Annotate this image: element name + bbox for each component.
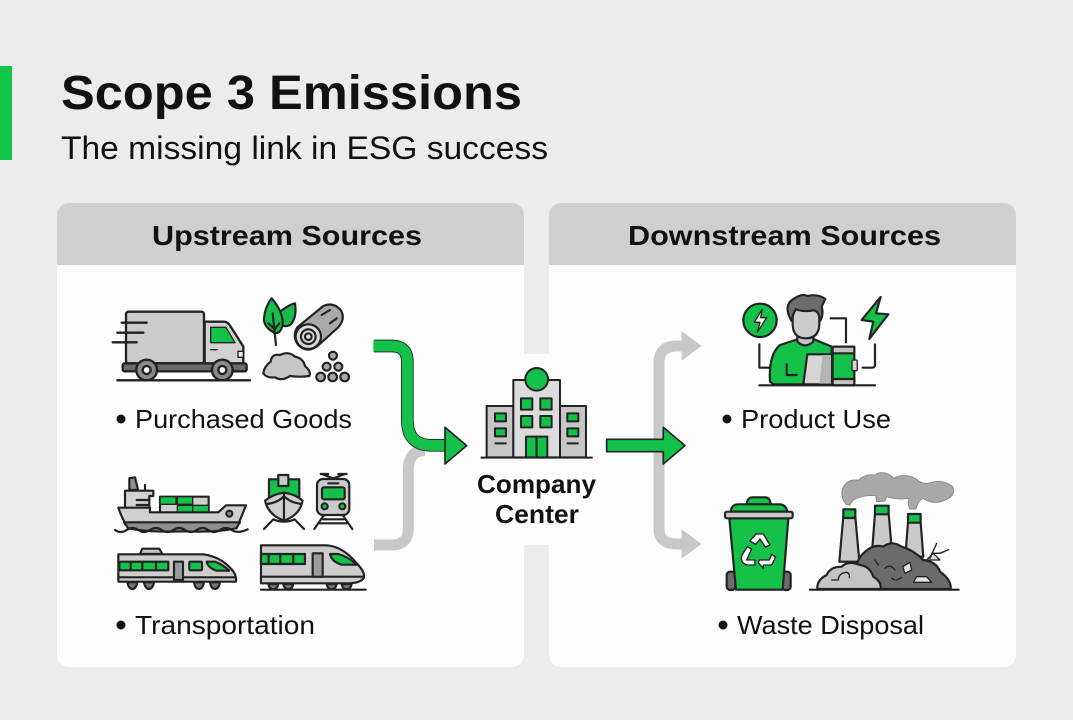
icon: raw materials <box>263 298 349 381</box>
arrow: gray upstream connector <box>374 451 425 545</box>
icon: passenger train <box>118 549 236 589</box>
icon: recycling bin <box>725 497 793 590</box>
accent bar <box>0 66 12 160</box>
icon: smokestacks and landfill <box>810 473 959 590</box>
icon: product user with devices <box>743 295 888 385</box>
downstream heading: Downstream Sources <box>628 220 941 251</box>
label: product use: Product Use <box>741 404 891 434</box>
icon: ship front view <box>264 475 304 529</box>
panel: downstream sources <box>549 203 1016 667</box>
icon: train front view <box>314 474 352 529</box>
icon: company building <box>481 368 593 458</box>
subtitle: The missing link in ESG success <box>61 130 548 166</box>
label: company center: Center <box>495 499 579 529</box>
upstream heading: Upstream Sources <box>152 220 422 251</box>
icon: bullet train <box>261 545 366 590</box>
center bridge between panels <box>520 354 553 545</box>
upstream header bar <box>57 203 524 265</box>
label: purchased goods: Purchased Goods <box>135 404 352 434</box>
label: company center <box>477 469 597 529</box>
panel: upstream sources <box>57 203 524 667</box>
arrow: green downstream arrow <box>607 427 685 464</box>
label: waste disposal: Waste Disposal <box>737 610 924 640</box>
icon: delivery truck <box>113 312 250 380</box>
arrow: green upstream arrow <box>374 340 467 464</box>
arrow: gray downstream branches <box>659 331 702 559</box>
label: transportation: Transportation <box>135 610 315 640</box>
label: company center: Company <box>477 469 597 499</box>
downstream header bar <box>549 203 1016 265</box>
title: Scope 3 Emissions <box>61 67 522 120</box>
icon: container ship <box>115 477 248 532</box>
